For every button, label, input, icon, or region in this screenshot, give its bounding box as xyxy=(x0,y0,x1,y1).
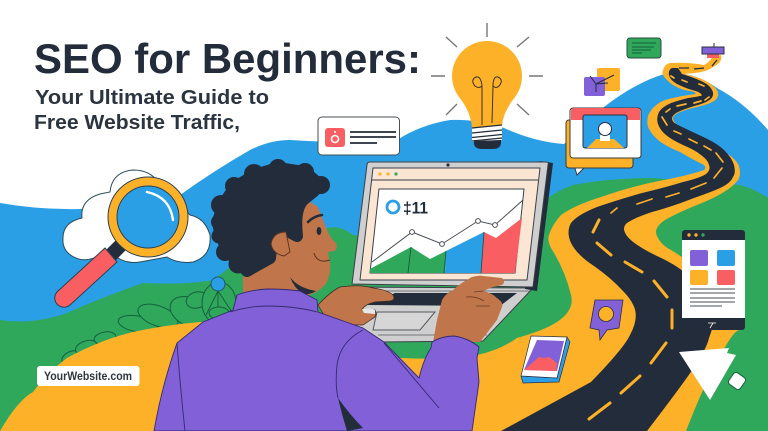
subtitle xyxy=(34,86,269,134)
left hand xyxy=(318,286,394,325)
icon: green note xyxy=(627,38,661,58)
tablet mockup xyxy=(682,230,745,330)
neck and face xyxy=(243,197,337,295)
road surface xyxy=(501,68,735,431)
laptop lid back xyxy=(525,161,553,291)
road dashes upper xyxy=(611,76,723,213)
handle xyxy=(55,248,117,307)
green hills xyxy=(0,178,768,431)
rank badge: ‡11 xyxy=(403,198,428,218)
profile photo xyxy=(583,115,627,148)
icon: location pin xyxy=(590,300,623,340)
rank badge xyxy=(387,198,428,218)
sleeve shadow xyxy=(338,398,363,431)
road dashes top xyxy=(679,60,717,69)
lens xyxy=(112,182,184,252)
handle neck xyxy=(108,238,128,258)
smile xyxy=(314,253,330,261)
road xyxy=(501,60,735,431)
icon: phone with picture xyxy=(521,336,570,383)
laptop screen frame xyxy=(352,162,548,287)
subtitle line one: Your Ultimate Guide to xyxy=(35,86,269,109)
bulb screw xyxy=(472,125,502,142)
laptop base xyxy=(345,287,533,342)
ear xyxy=(271,232,290,256)
bushes xyxy=(60,277,236,366)
laptop keyboard xyxy=(367,293,517,306)
laptop xyxy=(345,161,553,342)
icon: magnifying glass xyxy=(55,177,188,307)
website label xyxy=(37,366,140,386)
shirt seams xyxy=(177,306,439,431)
rays xyxy=(431,23,543,115)
icon: cloud xyxy=(63,170,210,262)
laptop trackpad xyxy=(373,312,435,330)
blue sky hills xyxy=(0,73,768,340)
icon: light bulb xyxy=(431,23,543,149)
icon: sticky squares xyxy=(584,68,620,96)
icon: camera xyxy=(446,163,450,167)
filament xyxy=(473,77,501,125)
trend line xyxy=(372,200,523,262)
subtitle line two: Free Website Traffic, xyxy=(34,111,240,134)
website label: YourWebsite.com xyxy=(44,371,132,383)
eyebrow xyxy=(308,215,322,222)
chart areas xyxy=(370,247,446,273)
icon: signpost xyxy=(702,43,724,58)
lens highlight xyxy=(147,192,173,220)
road dashes lower xyxy=(589,220,672,419)
icon: blue dot xyxy=(211,277,225,291)
chart xyxy=(370,189,524,273)
hair xyxy=(211,159,330,274)
browser window xyxy=(360,168,540,280)
bulb cap xyxy=(474,140,501,149)
eye xyxy=(317,227,321,235)
beard shadow xyxy=(290,277,316,294)
icon: chat window xyxy=(566,108,641,175)
bulb glass xyxy=(452,41,522,128)
right hand xyxy=(433,276,504,342)
purple shirt xyxy=(154,289,479,431)
person xyxy=(154,159,504,431)
title: SEO for Beginners: xyxy=(34,35,421,82)
icon: notification card xyxy=(318,117,400,155)
icon: cursor arrow xyxy=(679,348,747,400)
